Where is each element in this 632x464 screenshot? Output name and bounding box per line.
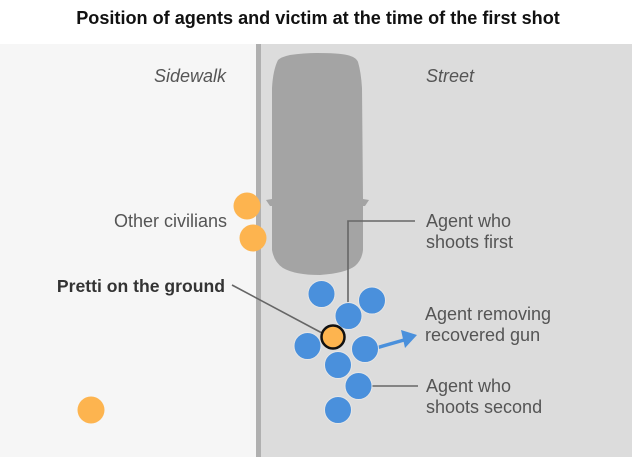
label: other civilians: Other civilians <box>114 211 227 231</box>
civilian marker 3 <box>78 396 104 424</box>
agent: removing recovered gun <box>352 336 378 362</box>
agent: shoots first <box>335 302 362 330</box>
label: agent removing recovered gun: recovered gun <box>425 325 540 345</box>
icon: vehicle <box>266 53 369 275</box>
marker: Pretti <box>322 326 344 348</box>
title: Position of agents and victim at the time of the first shot <box>76 8 560 28</box>
agent marker <box>308 280 335 308</box>
arrow: gun removal direction <box>376 330 417 348</box>
agent marker <box>358 287 386 314</box>
label: street: Street <box>426 66 475 86</box>
curb line <box>256 44 261 457</box>
leader line: agent who shoots first <box>348 221 415 304</box>
label: Pretti on the ground: Pretti on the ground <box>57 276 225 296</box>
label: sidewalk: Sidewalk <box>154 66 227 86</box>
panel: street area <box>261 44 632 457</box>
panel: sidewalk area <box>0 44 256 457</box>
civilian marker 1 <box>234 192 260 220</box>
label: agent who shoots second: Agent who <box>426 376 511 396</box>
agent marker <box>324 396 352 424</box>
group: agents <box>294 280 386 424</box>
leader line: agent who shoots second <box>368 385 418 387</box>
agent marker <box>324 352 352 378</box>
leader line: Pretti <box>232 285 322 333</box>
label: agent who shoots first: shoots first <box>426 232 513 252</box>
label: agent removing recovered gun: Agent removing <box>425 304 551 324</box>
label: agent who shoots first: Agent who <box>426 211 511 231</box>
agent marker <box>294 332 321 360</box>
agent: shoots second <box>345 372 372 400</box>
civilian marker 2 <box>240 224 266 252</box>
group: civilians <box>78 192 266 424</box>
label: agent who shoots second: shoots second <box>426 397 542 417</box>
